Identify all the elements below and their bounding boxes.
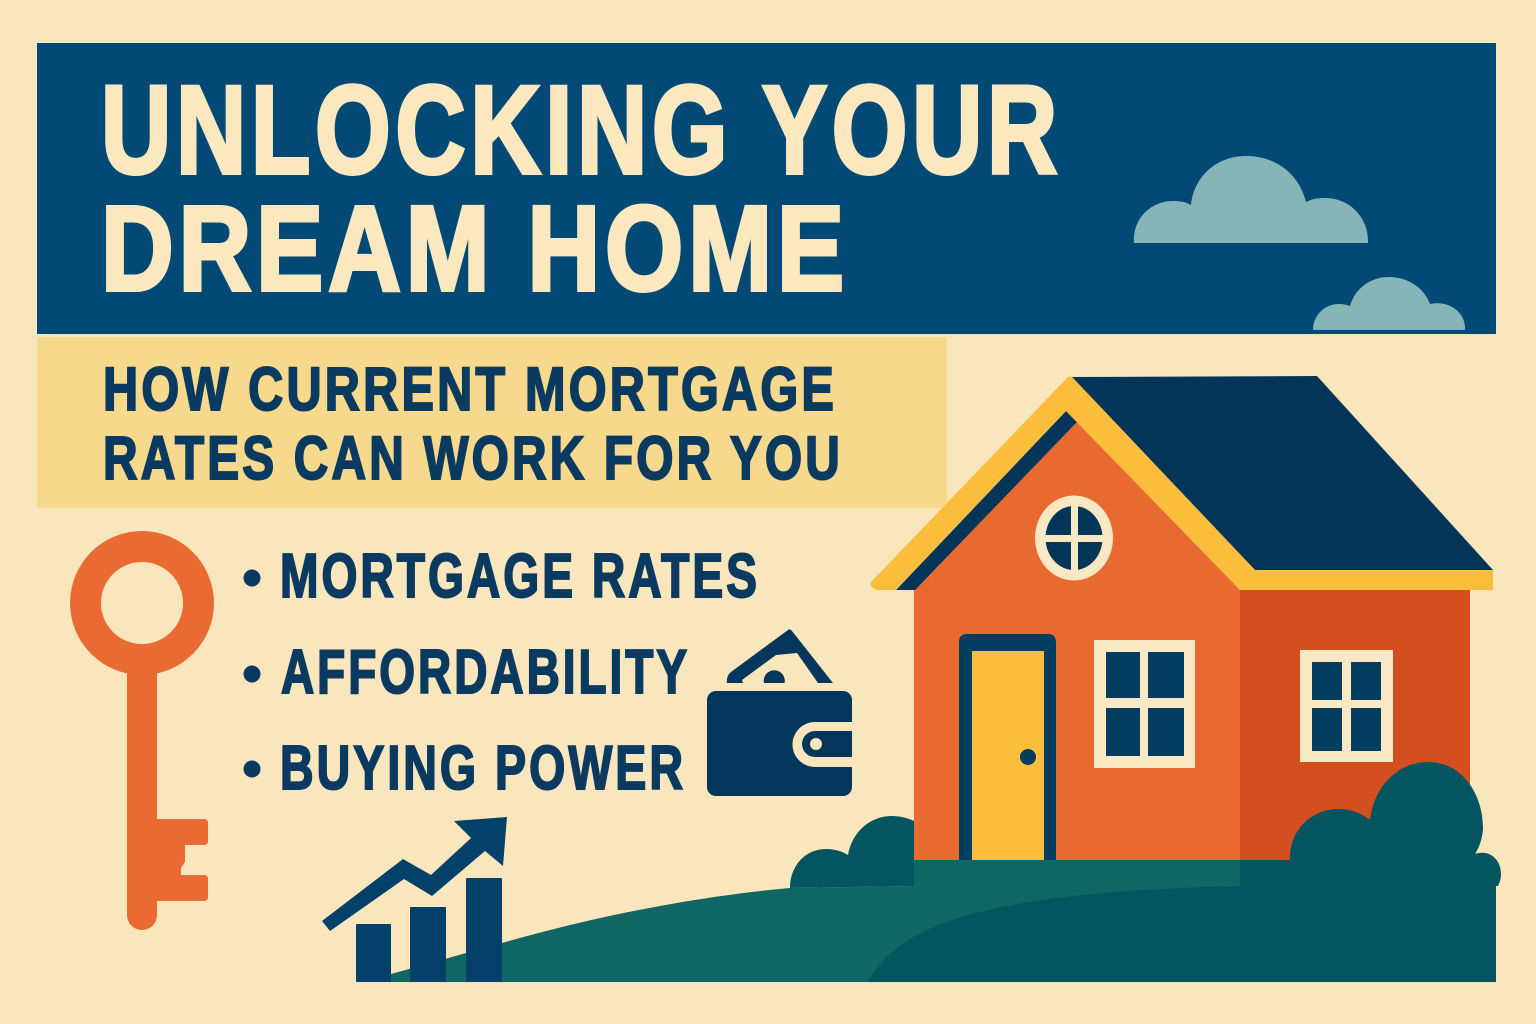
subtitle: RATES CAN WORK FOR YOU	[103, 424, 843, 492]
icon: small cloud	[1313, 277, 1465, 330]
bullet: mortgage rates: MORTGAGE RATES	[280, 542, 760, 611]
bullet: buying power: BUYING POWER	[280, 734, 686, 803]
bullet: affordability	[244, 638, 690, 707]
ground: hill	[385, 860, 1496, 982]
icon: rising bar chart with arrow	[322, 817, 507, 982]
house: round window	[1035, 496, 1113, 580]
bullet: affordability: AFFORDABILITY	[281, 638, 690, 707]
house: gable fascia	[896, 411, 1077, 590]
subtitle	[103, 355, 843, 492]
title: DREAM HOME	[101, 180, 849, 316]
ground: dark band right of house	[1240, 860, 1496, 886]
house	[871, 376, 1493, 860]
subtitle: HOW CURRENT MORTGAGE	[103, 355, 837, 423]
house: roof	[1072, 376, 1493, 570]
house: front window	[1094, 640, 1195, 768]
panel: title banner	[37, 43, 1496, 334]
ground: dark foreground hill	[868, 886, 1496, 982]
bush: right	[1290, 762, 1501, 886]
title	[101, 61, 1062, 316]
house: yellow roof trim	[871, 376, 1493, 590]
icon: large cloud	[1134, 156, 1368, 243]
house: side window	[1300, 650, 1393, 762]
icon: key	[70, 531, 214, 930]
house: side wall	[1240, 590, 1470, 860]
house: door	[959, 634, 1056, 860]
panel: subtitle band	[37, 337, 947, 508]
house: front wall	[914, 422, 1240, 860]
title: UNLOCKING YOUR	[101, 61, 1062, 200]
bush: left	[790, 816, 914, 888]
icon: wallet with cash	[707, 629, 852, 796]
bullet list	[244, 542, 760, 803]
